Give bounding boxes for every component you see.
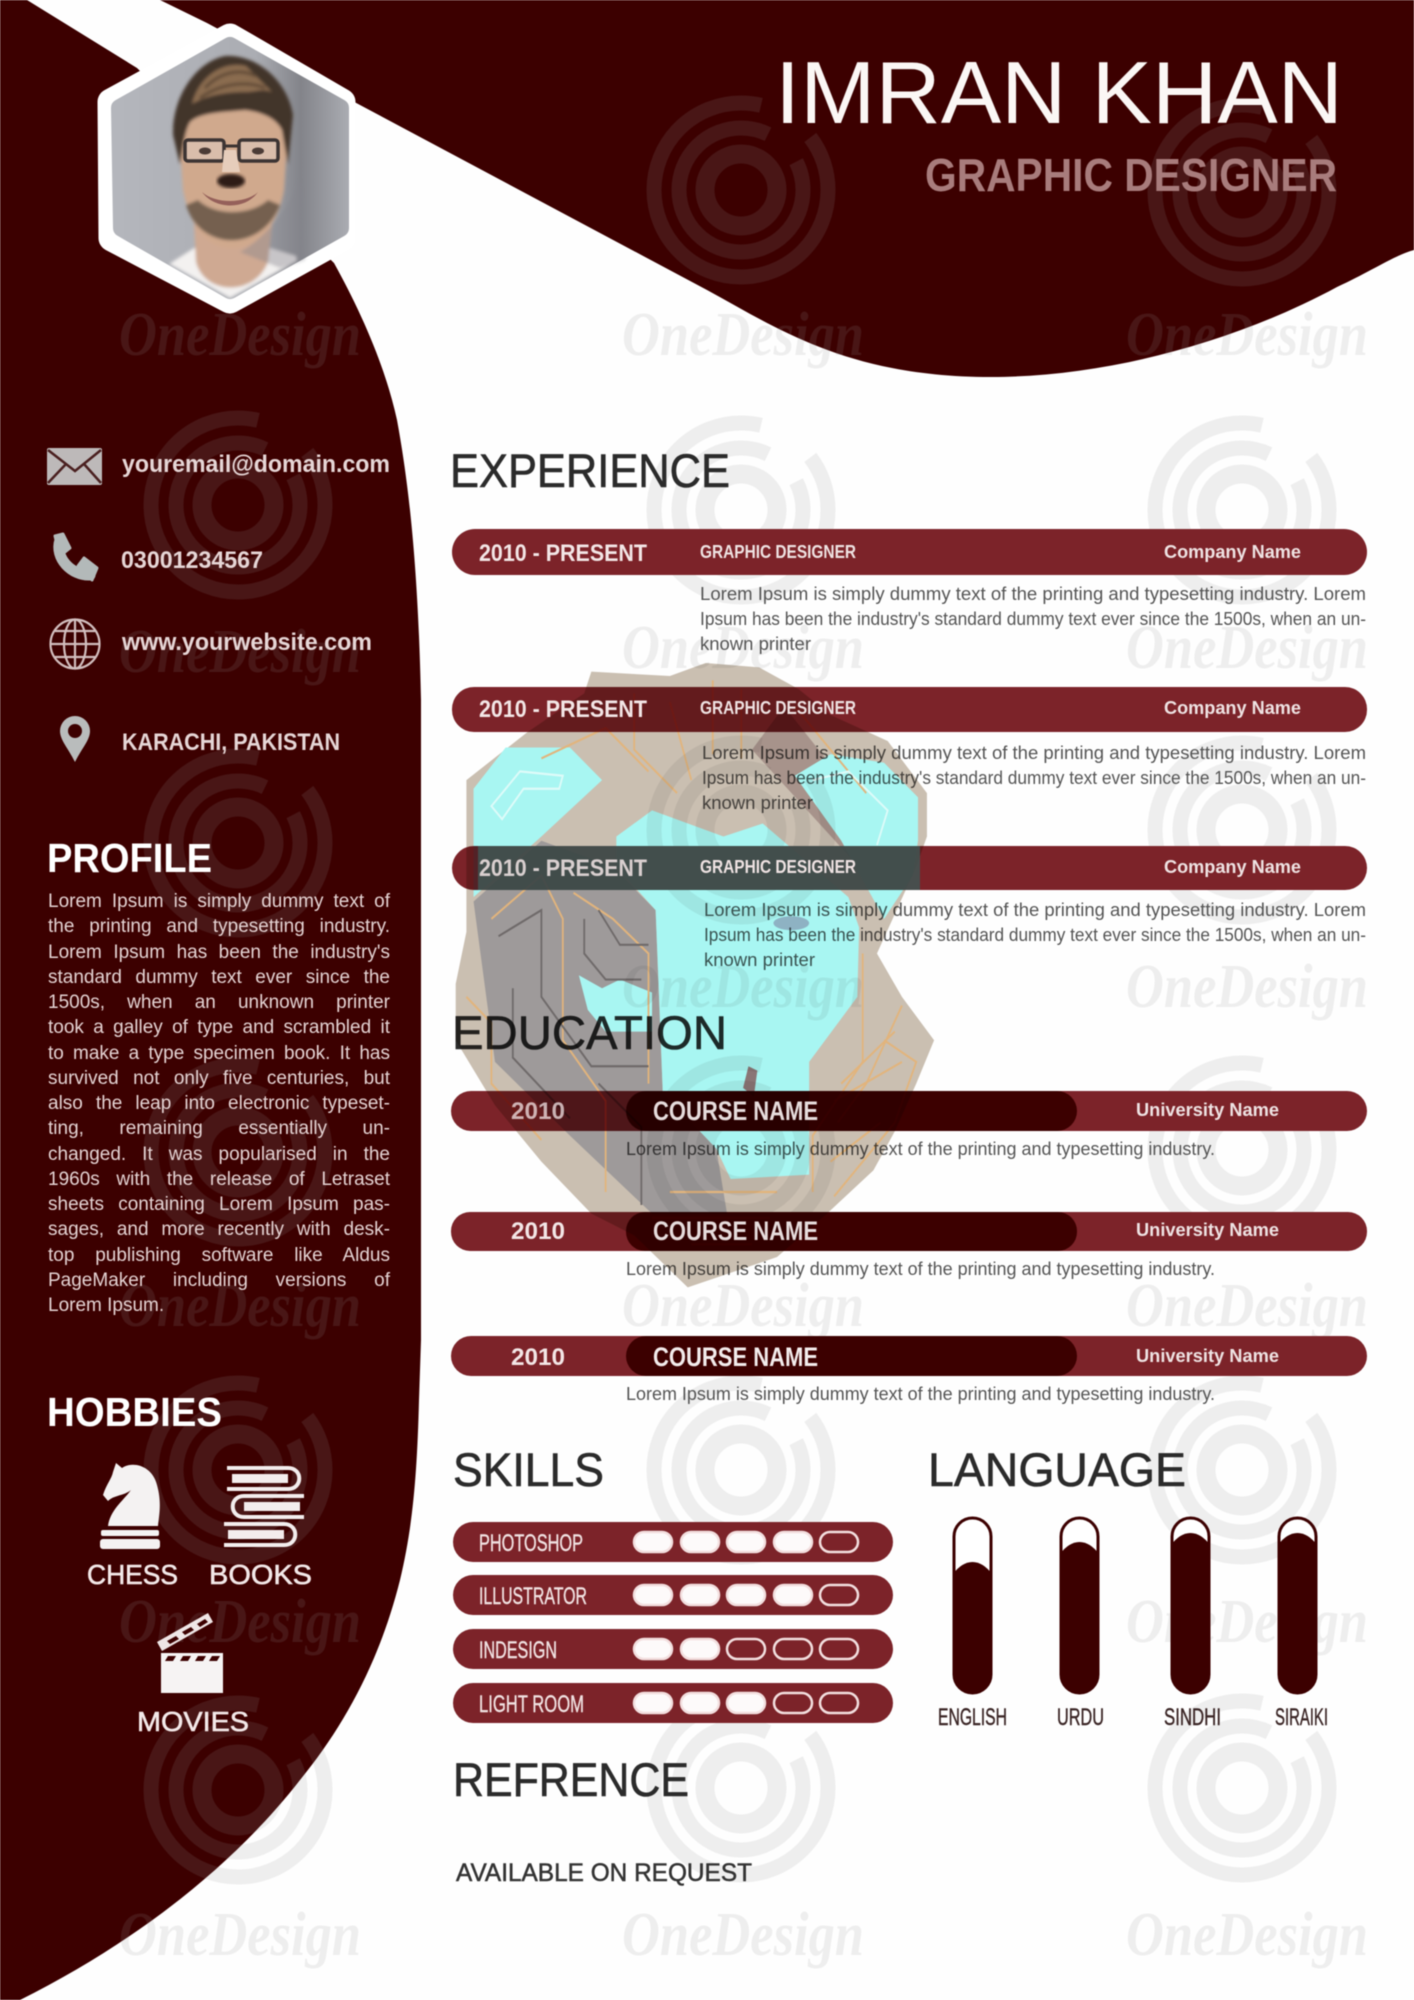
- skill: indesign: [453, 1629, 893, 1669]
- icon: globe: [50, 620, 100, 668]
- watermark: OneDesign wordmarks: OneDesign: [622, 1272, 864, 1340]
- skill: light room: LIGHT ROOM: [479, 1691, 584, 1718]
- subtitle: job title: GRAPHIC DESIGNER: [925, 149, 1337, 201]
- education bar labels: COURSE NAME: [653, 1342, 818, 1372]
- skill: light room: [453, 1683, 893, 1723]
- experience descriptions: known printer: [702, 793, 813, 813]
- panel: top header band: [160, 0, 1414, 377]
- icon: clapperboard: [157, 1613, 223, 1693]
- skill: illustrator: ILLUSTRATOR: [479, 1583, 587, 1610]
- text block: profile paragraph: standard dummy text ever since the: [48, 967, 390, 988]
- email text: youremail@domain.com: [122, 451, 390, 478]
- education descriptions: [626, 1139, 1215, 1404]
- skill: illustrator: [453, 1575, 893, 1615]
- watermark: OneDesign wordmarks: OneDesign: [622, 953, 864, 1021]
- phone number: 03001234567: [121, 547, 263, 574]
- experience descriptions: [700, 584, 1366, 970]
- experience bar labels: GRAPHIC DESIGNER: [700, 542, 856, 562]
- text block: profile paragraph: took a galley of type and scrambled it: [48, 1017, 390, 1038]
- experience bar labels: Company Name: [1164, 698, 1301, 718]
- language: siraiki: [1275, 1518, 1328, 1731]
- experience bar labels: [479, 540, 1301, 882]
- experience descriptions: Lorem Ipsum is simply dummy text of the printing and typesetting industry. Lorem: [700, 584, 1366, 604]
- watermark: OneDesign wordmarks: OneDesign: [622, 614, 864, 682]
- education bar labels: University Name: [1136, 1220, 1279, 1240]
- education bar labels: [511, 1096, 1279, 1372]
- watermark: OneDesign wordmarks: OneDesign: [119, 1901, 361, 1969]
- experience descriptions: known printer: [700, 634, 811, 654]
- website text: www.yourwebsite.com: [121, 629, 372, 656]
- heading: education: EDUCATION: [452, 1006, 727, 1059]
- education descriptions: Lorem Ipsum is simply dummy text of the printing and typesetting industry.: [626, 1384, 1215, 1404]
- icon: chess knight: [100, 1463, 160, 1549]
- text block: profile paragraph: [48, 891, 391, 1316]
- experience bar labels: 2010 - PRESENT: [479, 696, 647, 723]
- text block: profile paragraph: also the leap into electronic typeset-: [48, 1093, 390, 1114]
- panel: left sidebar: [0, 0, 421, 2000]
- watermark: OneDesign wordmarks: OneDesign: [119, 301, 361, 369]
- experience bar labels: Company Name: [1164, 542, 1301, 562]
- icon: map pin: [60, 716, 90, 762]
- heading: hobbies: HOBBIES: [47, 1389, 222, 1435]
- watermark: OneDesign wordmarks: OneDesign: [1126, 1588, 1368, 1656]
- education bar labels: University Name: [1136, 1346, 1279, 1366]
- text block: profile paragraph: sheets containing Lorem Ipsum pas-: [48, 1194, 390, 1215]
- language: urdu: URDU: [1057, 1704, 1104, 1731]
- icon: stack of books: [224, 1468, 304, 1545]
- watermark: OneDesign wordmarks: OneDesign: [1126, 953, 1368, 1021]
- experience bar labels: GRAPHIC DESIGNER: [700, 698, 856, 718]
- watermark: OneDesign wordmarks: OneDesign: [1126, 614, 1368, 682]
- title: name: IMRAN KHAN: [775, 43, 1343, 142]
- experience descriptions: Lorem Ipsum is simply dummy text of the printing and typesetting industry. Lorem: [704, 900, 1366, 920]
- experience descriptions: Lorem Ipsum is simply dummy text of the printing and typesetting industry. Lorem: [702, 743, 1366, 763]
- education descriptions: Lorem Ipsum is simply dummy text of the printing and typesetting industry.: [626, 1139, 1215, 1159]
- experience bar labels: Company Name: [1164, 857, 1301, 877]
- watermark: OneDesign wordmarks: OneDesign: [119, 1272, 361, 1340]
- education bar labels: 2010: [511, 1218, 565, 1245]
- text block: profile paragraph: top publishing software like Aldus: [48, 1244, 390, 1266]
- text block: profile paragraph: Lorem Ipsum has been the industry's: [48, 942, 390, 962]
- experience descriptions: Ipsum has been the industry's standard dummy text ever since the 1500s, when an un-: [700, 609, 1366, 629]
- skill: photoshop: PHOTOSHOP: [479, 1530, 583, 1557]
- icon: envelope: [47, 448, 102, 485]
- experience descriptions: Ipsum has been the industry's standard dummy text ever since the 1500s, when an un-: [702, 768, 1366, 788]
- language: sindhi: SINDHI: [1164, 1704, 1221, 1731]
- section: hobbies: [47, 1389, 312, 1737]
- education bars: [451, 1091, 1367, 1376]
- location text: KARACHI, PAKISTAN: [122, 729, 340, 756]
- education bar labels: COURSE NAME: [653, 1096, 818, 1126]
- language: sindhi: [1164, 1518, 1221, 1731]
- heading: profile: PROFILE: [47, 835, 212, 881]
- text block: profile paragraph: Lorem Ipsum is simply dummy text of: [48, 891, 390, 912]
- text block: profile paragraph: to make a type specimen book. It has: [48, 1042, 390, 1064]
- heading: reference: REFRENCE: [453, 1753, 689, 1806]
- watermark: OneDesign wordmarks: OneDesign: [119, 618, 361, 686]
- education bar labels: 2010: [511, 1344, 565, 1371]
- label: books: BOOKS: [209, 1559, 312, 1590]
- text: available on request: AVAILABLE ON REQUEST: [456, 1859, 752, 1887]
- experience bar labels: 2010 - PRESENT: [479, 855, 647, 882]
- education bar labels: University Name: [1136, 1100, 1279, 1120]
- language: siraiki: SIRAIKI: [1275, 1704, 1328, 1731]
- section: language: [928, 1443, 1328, 1731]
- watermark: OneDesign wordmarks: OneDesign: [622, 1901, 864, 1969]
- overlay: teal circuit-face stamp: [456, 663, 934, 1287]
- experience bars: [452, 529, 1367, 890]
- text block: profile paragraph: Lorem Ipsum.: [48, 1295, 164, 1316]
- education descriptions: Lorem Ipsum is simply dummy text of the printing and typesetting industry.: [626, 1259, 1215, 1279]
- text block: profile paragraph: the printing and typesetting industry.: [48, 916, 390, 937]
- heading: skills: SKILLS: [453, 1443, 604, 1496]
- watermark: OneDesign wordmarks: OneDesign: [119, 1588, 361, 1656]
- watermark: OneDesign wordmarks: OneDesign: [1126, 1272, 1368, 1340]
- language: english: [938, 1518, 1007, 1731]
- skill: indesign: INDESIGN: [479, 1637, 557, 1664]
- text block: profile paragraph: 1960s with the release of Letraset: [48, 1169, 390, 1190]
- watermark: OneDesign wordmarks: [119, 301, 1368, 1969]
- heading: language: LANGUAGE: [928, 1443, 1186, 1496]
- experience descriptions: known printer: [704, 950, 815, 970]
- text block: profile paragraph: ting, remaining essentially un-: [48, 1118, 390, 1139]
- watermark: OneDesign wordmarks: OneDesign: [622, 301, 864, 369]
- watermark: concentric ring marks: [151, 103, 1329, 1877]
- experience bar labels: GRAPHIC DESIGNER: [700, 857, 856, 877]
- text block: profile paragraph: PageMaker including versions of: [48, 1270, 390, 1291]
- section: skills: [453, 1443, 893, 1723]
- education bar labels: COURSE NAME: [653, 1216, 818, 1246]
- skill: photoshop: [453, 1522, 893, 1562]
- text block: profile paragraph: sages, and more recently with desk-: [48, 1219, 390, 1240]
- education bar labels: 2010: [511, 1098, 565, 1125]
- experience descriptions: Ipsum has been the industry's standard dummy text ever since the 1500s, when an un-: [704, 925, 1366, 945]
- watermark: OneDesign wordmarks: OneDesign: [1126, 1901, 1368, 1969]
- text block: profile paragraph: changed. It was popularised in the: [48, 1144, 390, 1164]
- section: contact details: [47, 448, 390, 762]
- overlay: slate tint on third experience bar: [478, 846, 920, 890]
- label: chess: CHESS: [87, 1559, 178, 1590]
- watermark: OneDesign wordmarks: OneDesign: [1126, 301, 1368, 369]
- experience bar labels: 2010 - PRESENT: [479, 540, 647, 567]
- text block: profile paragraph: 1500s, when an unknown printer: [48, 992, 390, 1013]
- language: english: ENGLISH: [938, 1704, 1007, 1731]
- icon: phone: [55, 534, 97, 580]
- portrait: hexagonal photo frame: [111, 37, 342, 312]
- label: movies: MOVIES: [137, 1706, 249, 1737]
- text block: profile paragraph: survived not only five centuries, but: [48, 1068, 390, 1089]
- language: urdu: [1057, 1518, 1104, 1731]
- heading: experience: EXPERIENCE: [450, 444, 730, 497]
